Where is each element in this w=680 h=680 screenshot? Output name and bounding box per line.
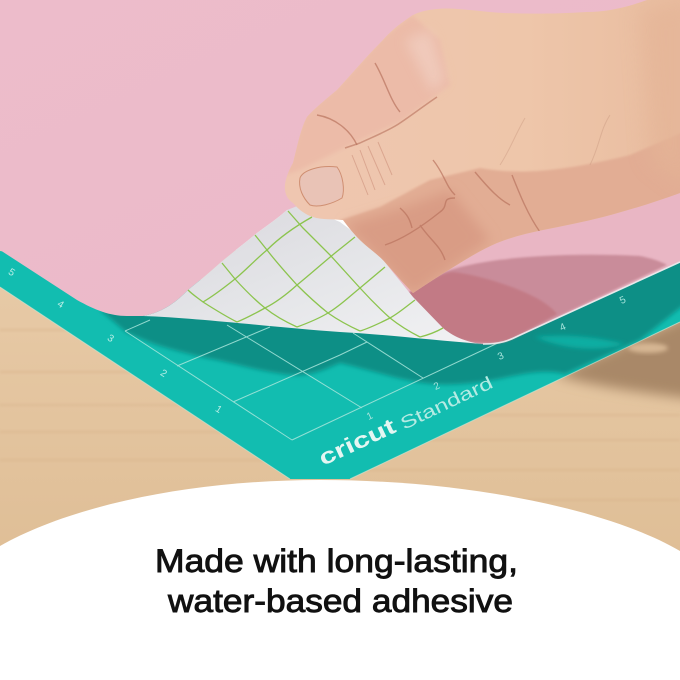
caption text [155,543,518,619]
wood shadow at right [559,322,680,404]
mat ruler numbers left: 3 [105,333,116,345]
mat ruler numbers left: 5 [6,267,17,279]
mat ruler numbers right: 2 [432,380,442,393]
mat ruler numbers right: 3 [496,350,506,363]
wrist shading [656,19,675,138]
teal reflection band [535,336,625,349]
background: wood table [0,250,680,560]
mat grid lines [125,320,500,440]
thumb knuckle wrinkles [352,142,392,195]
mat outer edge highlight [0,287,680,479]
caption text: water-based adhesive [167,583,513,619]
curled index finger shading [285,15,450,175]
Standard label: Standard [397,373,496,434]
white curved caption panel [0,480,680,680]
pink sheet [0,0,680,316]
curled white backing with green grid [143,205,483,344]
mat ruler numbers left [6,267,224,416]
thumb and index crease [345,97,437,148]
shadow cast on mat [100,250,680,384]
teal cutting mat [0,250,680,479]
mat ruler numbers right: 5 [618,294,628,307]
flap white edge [483,262,680,344]
finger creases [317,63,540,260]
flap darker inner fold [405,272,557,343]
flap shadow from hand [413,255,667,343]
curled pink flap underside [380,185,680,344]
cricut logo: cricut [315,413,400,471]
darker lower fingers [350,192,486,292]
green grid lines [188,211,443,337]
caption text: Made with long-lasting, [155,543,518,579]
knuckle highlight [408,33,444,87]
mat ruler numbers left: 2 [158,368,169,380]
mat ruler numbers right: 1 [365,410,375,423]
thumbnail [300,167,343,206]
back of hand wrinkles [500,115,610,165]
mat ruler numbers left: 1 [213,404,224,416]
mat ruler numbers left: 4 [55,299,66,311]
palm and lower fingers shading [340,146,680,292]
hand [285,0,680,305]
mat ruler numbers right: 4 [558,321,568,334]
mat ruler numbers right [365,294,628,423]
